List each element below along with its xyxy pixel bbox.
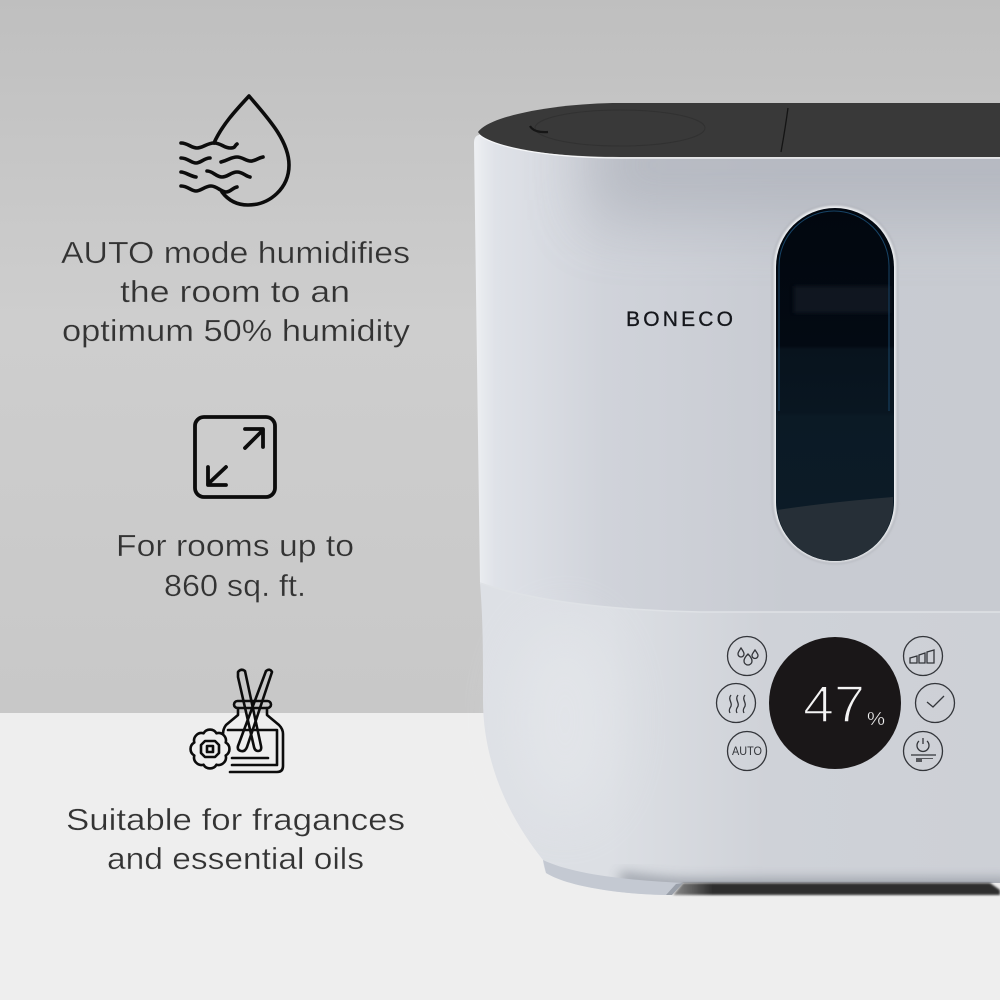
dark lid bbox=[478, 103, 1000, 157]
heading text: fragrances: Suitable for fragances bbox=[66, 802, 405, 837]
icon: heat waves bbox=[729, 695, 745, 713]
water tank window bbox=[773, 205, 897, 565]
icon: auto label: AUTO bbox=[732, 746, 762, 758]
seam bbox=[480, 583, 1000, 612]
heading text: room size: 860 sq. ft. bbox=[164, 568, 306, 603]
base lower shading bbox=[620, 878, 1000, 885]
brand logo: BONECO bbox=[626, 308, 733, 331]
icon: check bbox=[927, 696, 944, 707]
humidifier base bbox=[480, 583, 1000, 895]
heading text: fragrances: and essential oils bbox=[107, 841, 364, 876]
control buttons bbox=[716, 636, 954, 770]
product: humidifier bbox=[474, 103, 1000, 895]
icon: filter bar bbox=[916, 758, 933, 762]
display reading: % bbox=[867, 709, 885, 729]
heading text: auto mode: AUTO mode humidifies bbox=[61, 235, 410, 270]
heading text: room size: For rooms up to bbox=[116, 528, 354, 563]
base foot bbox=[543, 860, 683, 895]
heading text: auto mode: the room to an bbox=[120, 274, 350, 309]
icon: power and filter bbox=[911, 738, 936, 755]
lid seam and details bbox=[530, 108, 788, 152]
icon: level bars bbox=[910, 650, 934, 663]
icon: water drop with waves bbox=[181, 96, 289, 205]
humidifier upper body bbox=[474, 135, 1000, 612]
display circle bbox=[769, 637, 901, 769]
icon: reed diffuser with flower bbox=[191, 670, 283, 772]
icon: drops bbox=[738, 648, 758, 665]
lid highlight edge bbox=[479, 135, 1000, 158]
foot tip bbox=[666, 883, 683, 895]
base shadow on floor bbox=[673, 883, 1000, 895]
display reading: 47 bbox=[803, 676, 865, 734]
icon: expand square with arrows bbox=[195, 417, 275, 497]
heading text: auto mode: optimum 50% humidity bbox=[62, 313, 411, 348]
base soft highlight bbox=[515, 620, 615, 820]
upper body shading bbox=[572, 157, 1000, 234]
